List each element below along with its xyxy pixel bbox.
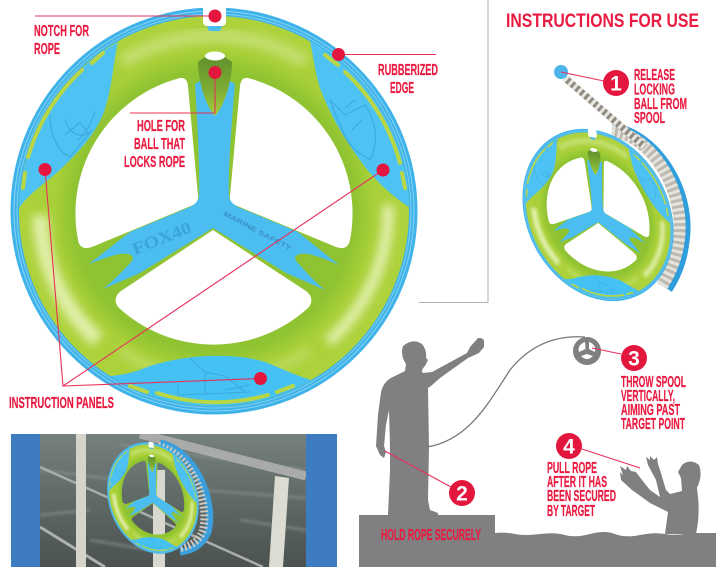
step 3: throw spool: AIMING PAST <box>621 402 680 419</box>
callout: instruction panels: INSTRUCTION PANELS <box>9 395 114 412</box>
tagline on spool: MARINE SAFETY <box>222 211 293 253</box>
callout: rubberized edge <box>332 48 438 97</box>
silhouette: man throwing <box>376 338 484 515</box>
step 4: pull rope: AFTER IT HAS <box>547 474 607 491</box>
photo: spool on railing <box>11 434 337 567</box>
illustration: spool with rope and locking ball <box>518 65 684 309</box>
brand mark on spool: FOX40 <box>129 218 194 259</box>
step 3: throw spool: VERTICALLY, <box>621 388 675 405</box>
rope thrown through the air <box>427 337 585 447</box>
callout: notch for rope: ROPE <box>34 41 60 58</box>
callout: notch for rope: NOTCH FOR <box>34 23 89 40</box>
silhouette: person in water <box>620 456 701 534</box>
callout: notch for rope <box>34 10 222 58</box>
step 4: pull rope: 4 <box>563 436 575 458</box>
step 4: pull rope: BEEN SECURED <box>547 488 616 505</box>
step 2: hold rope <box>381 451 481 544</box>
step 1: release locking ball: LOCKING <box>634 82 675 98</box>
scene: dock and water <box>359 515 716 567</box>
callout: hole for ball: LOCKS ROPE <box>124 154 185 171</box>
step 1: release locking ball: RELEASE <box>634 67 675 84</box>
callout: hole for ball: BALL THAT <box>134 136 185 153</box>
step 2: hold rope: 2 <box>456 482 468 506</box>
step 2: hold rope: HOLD ROPE SECURELY <box>381 527 481 544</box>
step 3: throw spool: 3 <box>628 348 640 370</box>
callout: rubberized edge: EDGE <box>390 80 414 97</box>
frame line around main diagram <box>419 0 488 302</box>
callout: rubberized edge: RUBBERIZED <box>378 62 438 79</box>
step 3: throw spool <box>592 345 686 433</box>
step 4: pull rope <box>547 433 640 520</box>
step 1: release locking ball <box>561 67 687 127</box>
step 1: release locking ball: 1 <box>610 72 622 96</box>
step 1: release locking ball: SPOOL <box>634 110 665 127</box>
main spool diagram <box>14 5 414 411</box>
step 4: pull rope: PULL ROPE <box>547 460 597 477</box>
callout: hole for ball: HOLE FOR <box>137 118 185 135</box>
callout: instruction panels <box>9 163 390 412</box>
icon: flying spool <box>573 337 601 365</box>
callout: hole for ball <box>124 66 222 171</box>
step 4: pull rope: BY TARGET <box>547 503 595 520</box>
